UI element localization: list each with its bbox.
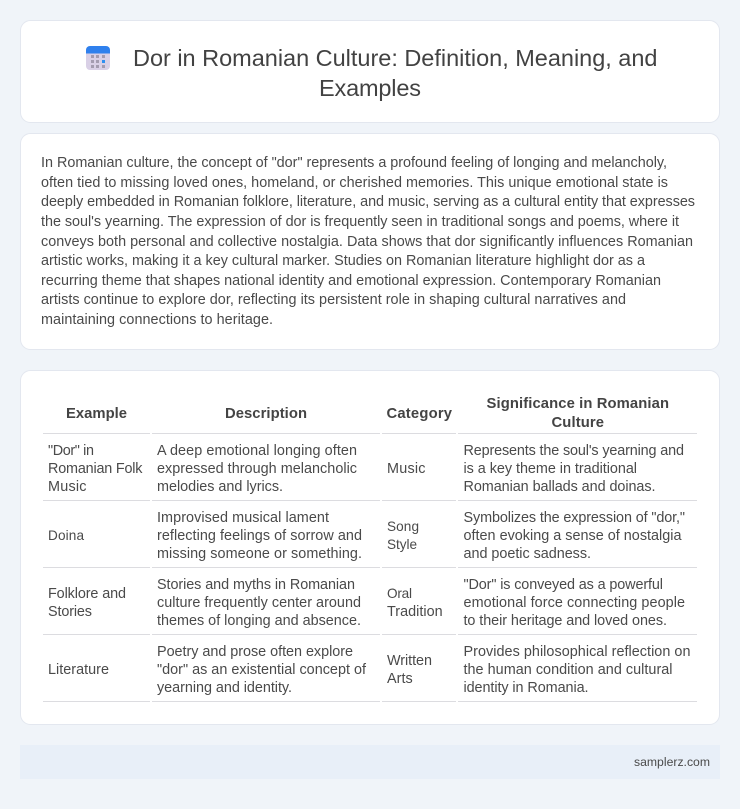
table row: Doina: missing someone or something. xyxy=(157,546,362,562)
table row: Literature: Written xyxy=(387,653,432,669)
table row: Folklore and Stories xyxy=(48,577,685,629)
table row: Folklore and Stories: culture frequently center around xyxy=(157,595,361,611)
table row: Doina: Symbolizes the expression of "dor," xyxy=(464,510,685,526)
title: Dor in Romanian Culture: Definition, Meaning, and xyxy=(133,45,658,71)
table row: Folklore and Stories: Oral xyxy=(387,586,412,601)
table row: Literature: Poetry and prose often explore xyxy=(157,644,353,660)
title: Examples xyxy=(319,75,421,101)
table header xyxy=(66,396,669,431)
table row: Dor in folk music: Romanian ballads and doinas. xyxy=(464,479,656,495)
table row: Folklore and Stories: Folklore and xyxy=(48,586,126,602)
table row: Literature: the human condition and cultural xyxy=(464,662,672,678)
table row: Doina: Song xyxy=(387,519,419,534)
table row: Literature: Literature xyxy=(48,662,109,678)
footer text: samplerz.com xyxy=(634,755,710,769)
table row: Doina xyxy=(48,510,685,562)
table row: Folklore and Stories: Stories xyxy=(48,604,92,620)
table row: Doina: Doina xyxy=(48,528,84,543)
table row: Dor in folk music: is a key theme in traditional xyxy=(464,461,637,477)
table row: Literature xyxy=(48,644,690,696)
text block: intro: deeply embedded in Romanian folklore, literature, and music, serving as a cultural entity that expresses xyxy=(41,194,695,210)
table row: Folklore and Stories: "Dor" is conveyed as a powerful xyxy=(464,577,663,593)
table row: Literature: "dor" as an existential concept of xyxy=(157,662,367,678)
table row: Folklore and Stories: emotional force connecting people xyxy=(464,595,685,611)
table row: Dor in folk music: A deep emotional longing often xyxy=(157,443,357,459)
table row: Folklore and Stories: themes of longing and absence. xyxy=(157,613,361,629)
footer bar xyxy=(20,745,720,779)
table row: Dor in folk music xyxy=(48,443,684,495)
text block: intro: the soul's yearning. The expression of dor is frequently seen in traditional songs and poems, where it xyxy=(41,214,679,230)
table header: Example xyxy=(66,406,127,422)
table row: Doina: Style xyxy=(387,537,417,552)
table row: Doina: often evoking a sense of nostalgia xyxy=(464,528,682,544)
panel: title card xyxy=(20,20,720,122)
table row: Literature: yearning and identity. xyxy=(157,680,292,696)
table row: Dor in folk music: Romanian Folk xyxy=(48,461,143,477)
icon: calendar xyxy=(86,46,110,70)
table row: Dor in folk music: Music xyxy=(48,479,86,495)
text block: intro: recurring theme that shapes national identity and emotional expression. Contemporary Romanian xyxy=(41,273,661,289)
table row: Literature: identity in Romania. xyxy=(464,680,588,696)
table header: Culture xyxy=(552,415,604,431)
table row: Literature: Arts xyxy=(387,671,413,687)
table header: Category xyxy=(386,406,453,422)
table header: Significance in Romanian xyxy=(486,396,669,412)
table row: Folklore and Stories: Tradition xyxy=(387,604,443,620)
text block: intro: often tied to missing loved ones, homeland, or cherished memories. This unique emotional state is xyxy=(41,175,668,191)
table row: Dor in folk music: Music xyxy=(387,461,426,477)
title xyxy=(133,45,658,101)
text block: intro: In Romanian culture, the concept of "dor" represents a profound feeling of longing and melancholy, xyxy=(41,155,667,171)
panel: table card xyxy=(20,370,720,724)
table row: Folklore and Stories: to their heritage and loved ones. xyxy=(464,613,667,629)
table row: Dor in folk music: melodies and lyrics. xyxy=(157,479,283,495)
table row: Doina: reflecting feelings of sorrow and xyxy=(157,528,362,544)
text block: intro: conveys both personal and collective nostalgia. Data shows that dor significantly influences Romanian xyxy=(41,234,693,250)
table row: Dor in folk music: expressed through melancholic xyxy=(157,461,357,477)
table row: Literature: Provides philosophical reflection on xyxy=(464,644,690,660)
table header: Description xyxy=(225,406,307,422)
table row: Doina: Improvised musical lament xyxy=(157,510,329,526)
table row: Folklore and Stories: Stories and myths in Romanian xyxy=(157,577,355,593)
table row: Dor in folk music: "Dor" in xyxy=(48,443,94,459)
table row: Doina: and poetic sadness. xyxy=(464,546,591,562)
table row: Dor in folk music: Represents the soul's yearning and xyxy=(464,443,684,459)
text block: intro: artistic works, making it a key cultural marker. Studies on Romanian literature highlight dor as a xyxy=(41,253,645,269)
panel: intro paragraph xyxy=(20,134,720,350)
text block: intro: artists continue to explore dor, reflecting its persistent role in shaping cultural narratives and xyxy=(41,292,626,308)
text block: intro xyxy=(41,155,695,328)
text block: intro: maintaining connections to heritage. xyxy=(41,312,273,328)
